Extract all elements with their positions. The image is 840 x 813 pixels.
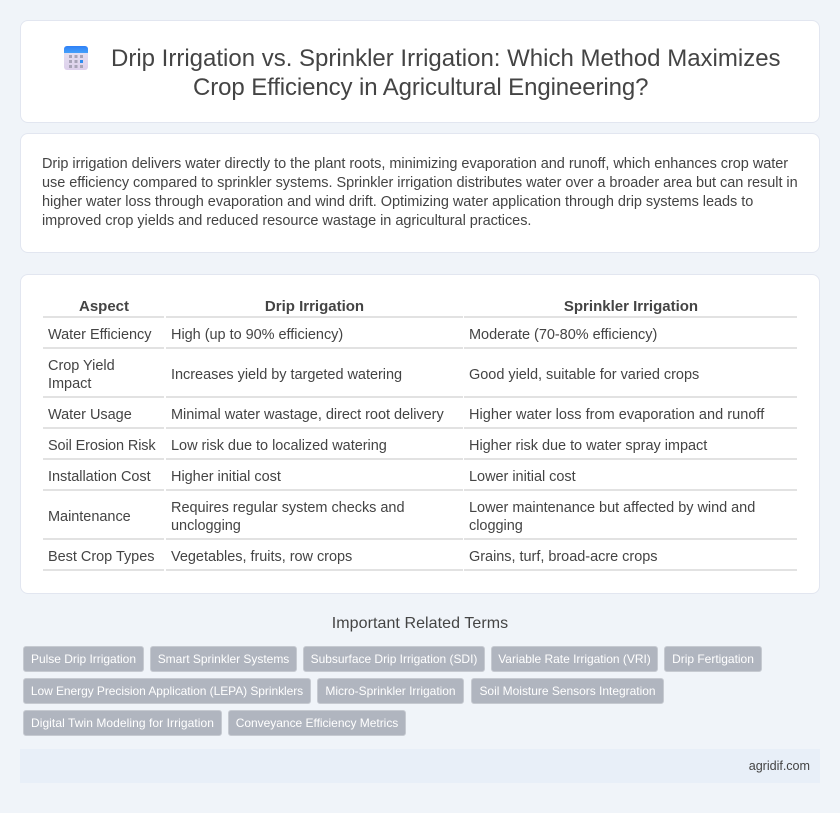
row: maintenance: Maintenance <box>48 509 131 525</box>
row: installation cost <box>48 469 576 485</box>
intro text <box>42 156 798 229</box>
tag group: related terms: Subsurface Drip Irrigation (SDI) <box>311 652 477 666</box>
row: soil erosion risk: Soil Erosion Risk <box>48 438 156 454</box>
row: best crop types: Vegetables, fruits, row crops <box>171 549 352 565</box>
table header: Aspect <box>79 298 129 315</box>
row: crop yield impact: Good yield, suitable for varied crops <box>469 367 699 383</box>
table header: Sprinkler Irrigation <box>564 298 698 315</box>
tag group: related terms: Conveyance Efficiency Metrics <box>236 716 398 730</box>
row: soil erosion risk <box>48 438 708 454</box>
intro text: Drip irrigation delivers water directly to the plant roots, minimizing evaporation and runoff, which enhances crop water <box>42 156 788 172</box>
intro text: improved crop yields and reduced resource wastage in agricultural practices. <box>42 213 531 229</box>
title <box>111 45 781 101</box>
row: best crop types: Grains, turf, broad-acre crops <box>469 549 657 565</box>
row: best crop types: Best Crop Types <box>48 549 154 565</box>
row: water efficiency: Moderate (70-80% efficiency) <box>469 327 657 343</box>
row: installation cost: Lower initial cost <box>469 469 576 485</box>
tag group: related terms: Soil Moisture Sensors Integration <box>479 684 656 698</box>
tag group: related terms: Pulse Drip Irrigation <box>31 652 136 666</box>
row: crop yield impact <box>48 358 699 392</box>
panel: introduction <box>20 133 820 253</box>
row: soil erosion risk: Higher risk due to water spray impact <box>469 438 707 454</box>
row: water efficiency <box>48 327 657 343</box>
table header <box>79 298 698 315</box>
row: crop yield impact: Increases yield by targeted watering <box>171 367 402 383</box>
row: installation cost: Higher initial cost <box>171 469 281 485</box>
heading: related terms: Important Related Terms <box>332 615 508 632</box>
row: installation cost: Installation Cost <box>48 469 151 485</box>
row: maintenance <box>48 500 755 534</box>
row: maintenance: Lower maintenance but affected by wind and <box>469 500 755 516</box>
icon: calendar <box>64 46 88 70</box>
row: water usage: Water Usage <box>48 407 132 423</box>
tag group: related terms: Digital Twin Modeling for Irrigation <box>31 716 214 730</box>
title line 2: Crop Efficiency in Agricultural Engineering? <box>193 74 648 101</box>
row: soil erosion risk: Low risk due to localized watering <box>171 438 387 454</box>
tag group: related terms: Variable Rate Irrigation (VRI) <box>498 652 651 666</box>
row: water usage: Minimal water wastage, direct root delivery <box>171 407 444 423</box>
row: best crop types <box>48 549 657 565</box>
row: water usage: Higher water loss from evaporation and runoff <box>469 407 764 423</box>
panel: comparison table <box>20 274 820 594</box>
footer bar <box>20 749 820 783</box>
row: crop yield impact: Crop Yield <box>48 358 115 374</box>
row: water efficiency: High (up to 90% efficiency) <box>171 327 343 343</box>
title line 1: Drip Irrigation vs. Sprinkler Irrigation: Which Method Maximizes <box>111 45 781 72</box>
row: maintenance: Requires regular system checks and <box>171 500 405 516</box>
table header: Drip Irrigation <box>265 298 364 315</box>
row: water efficiency: Water Efficiency <box>48 327 151 343</box>
intro text: use efficiency compared to sprinkler systems. Sprinkler irrigation distributes water over a broader area but can result in <box>42 175 798 191</box>
footer source: agridif.com <box>749 759 810 773</box>
tag group: related terms: Micro-Sprinkler Irrigation <box>325 684 456 698</box>
tag group: related terms: Drip Fertigation <box>672 652 754 666</box>
tag group: related terms: Smart Sprinkler Systems <box>158 652 289 666</box>
intro text: higher water loss through evaporation and wind drift. Optimizing water application through drip systems leads to <box>42 194 753 210</box>
row: crop yield impact: Impact <box>48 376 91 392</box>
tag group: related terms <box>23 646 762 736</box>
tag group: related terms: Low Energy Precision Application (LEPA) Sprinklers <box>31 684 303 698</box>
row: water usage <box>48 407 764 423</box>
row: maintenance: unclogging <box>171 518 241 534</box>
row: maintenance: clogging <box>469 518 523 534</box>
panel: title <box>20 20 820 123</box>
